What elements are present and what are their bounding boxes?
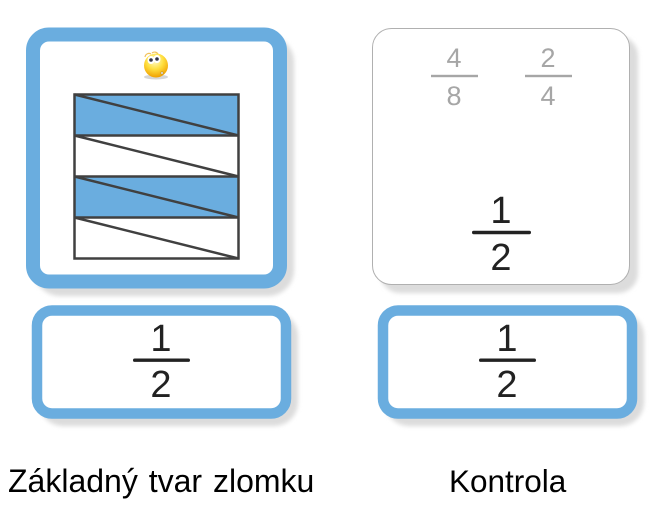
fraction: 2/4: 2 <box>540 43 556 73</box>
fraction: 1/2: 2 <box>496 364 518 406</box>
fraction: 1/2 <box>133 318 190 406</box>
fraction: 1/2: 1 <box>150 318 172 360</box>
fraction: 1/2: 2 <box>490 237 512 279</box>
fraction: 1/2 <box>479 318 536 406</box>
fraction: 4/8 <box>431 43 478 111</box>
fraction: 1/2: 1 <box>490 190 512 232</box>
card: answer fraction left <box>37 310 298 426</box>
fraction: 1/2 <box>472 190 531 279</box>
panel: control card <box>372 28 638 293</box>
card: answer fraction right <box>383 310 644 426</box>
fraction: 2/4 <box>525 43 572 111</box>
chart: square divided into eight triangles <box>74 94 238 258</box>
fraction: 1/2: 2 <box>150 364 172 406</box>
panel: shaded fraction diagram <box>33 34 294 296</box>
fraction: 1/2: 1 <box>496 318 518 360</box>
icon: surprised smiley <box>144 52 168 80</box>
fraction: 4/8: 4 <box>446 43 462 73</box>
caption: left: Základný tvar zlomku <box>8 463 314 499</box>
fraction: 2/4: 4 <box>540 81 556 111</box>
caption: right: Kontrola <box>449 463 567 499</box>
fraction: 4/8: 8 <box>446 81 462 111</box>
